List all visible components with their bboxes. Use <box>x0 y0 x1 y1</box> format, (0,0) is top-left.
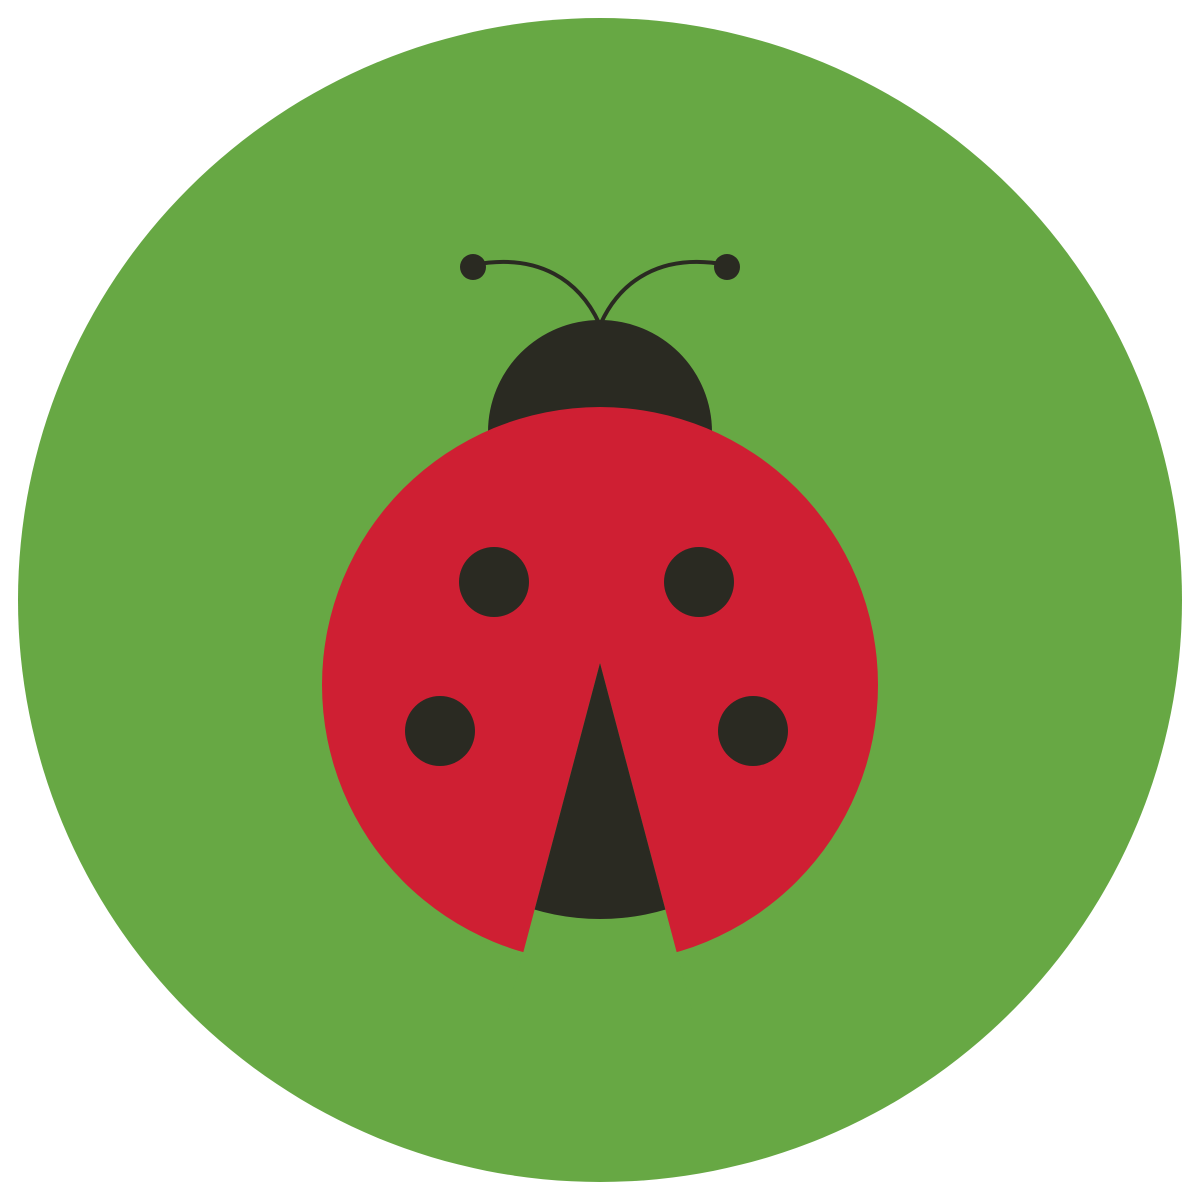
body <box>322 407 878 1010</box>
spots <box>405 547 788 766</box>
antennae <box>460 254 740 323</box>
head <box>488 320 712 544</box>
